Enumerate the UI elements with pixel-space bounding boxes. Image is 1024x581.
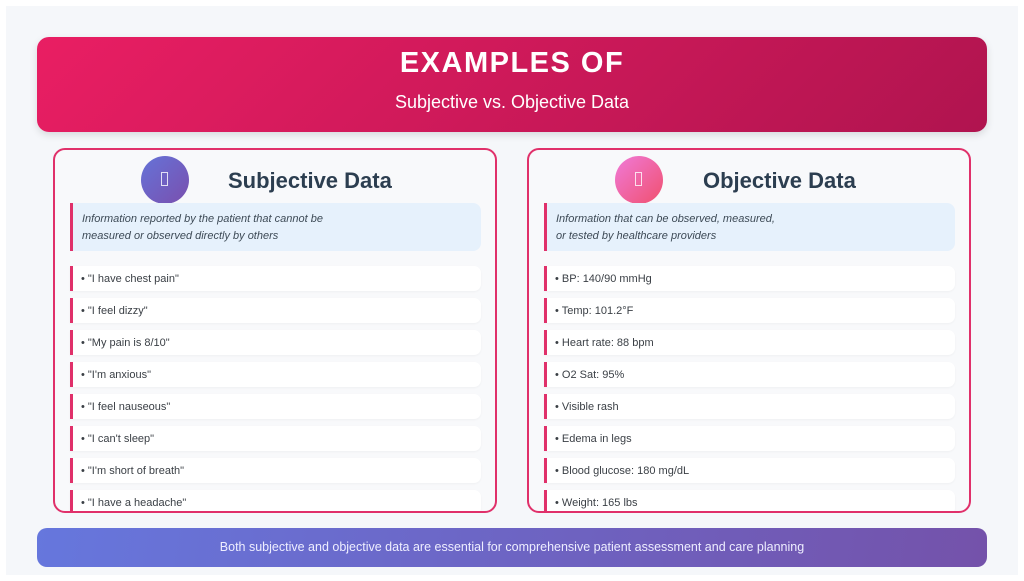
- list: objective examples: • Weight: 165 lbs: [555, 497, 638, 509]
- heading: objective data: Objective Data: [703, 168, 856, 193]
- list: subjective examples: • "I can't sleep": [81, 433, 154, 445]
- heading: subjective data: Subjective Data: [228, 168, 392, 193]
- icon: objective: [615, 156, 663, 204]
- header banner: [37, 37, 987, 132]
- subtitle: Subjective vs. Objective Data: [395, 92, 629, 112]
- list: subjective examples: • "I feel dizzy": [81, 305, 148, 317]
- list: objective examples: • O2 Sat: 95%: [555, 369, 624, 381]
- list: objective examples: • Visible rash: [555, 401, 619, 413]
- list: objective examples: • Blood glucose: 180 mg/dL: [555, 465, 689, 477]
- panel: objective data: [527, 148, 971, 513]
- footer callout: [37, 528, 987, 567]
- list: subjective examples: • "I feel nauseous": [81, 401, 170, 413]
- list: subjective examples: • "I have chest pain": [81, 273, 179, 285]
- list: subjective examples: • "I'm anxious": [81, 369, 151, 381]
- list: subjective examples: [70, 266, 186, 511]
- description: objective: [544, 203, 955, 251]
- description: subjective: [70, 203, 481, 251]
- icon: subjective: [141, 156, 189, 204]
- title: EXAMPLES OF: [400, 47, 624, 79]
- description: subjective: Information reported by the patient that cannot be: [82, 213, 323, 225]
- list: subjective examples: • "I have a headache": [81, 497, 186, 509]
- list: objective examples: • Heart rate: 88 bpm: [555, 337, 654, 349]
- list: objective examples: [544, 266, 689, 511]
- list: objective examples: • Edema in legs: [555, 433, 632, 445]
- description: objective: or tested by healthcare providers: [556, 230, 716, 242]
- list: objective examples: • BP: 140/90 mmHg: [555, 273, 652, 285]
- description: subjective: measured or observed directly by others: [82, 230, 278, 242]
- list: subjective examples: • "My pain is 8/10": [81, 337, 170, 349]
- footer callout: Both subjective and objective data are essential for comprehensive patient assessment and care planning: [220, 540, 804, 554]
- panel: subjective data: [53, 148, 497, 513]
- description: objective: Information that can be observed, measured,: [556, 213, 775, 225]
- list: objective examples: • Temp: 101.2°F: [555, 305, 633, 317]
- list: subjective examples: • "I'm short of breath": [81, 465, 184, 477]
